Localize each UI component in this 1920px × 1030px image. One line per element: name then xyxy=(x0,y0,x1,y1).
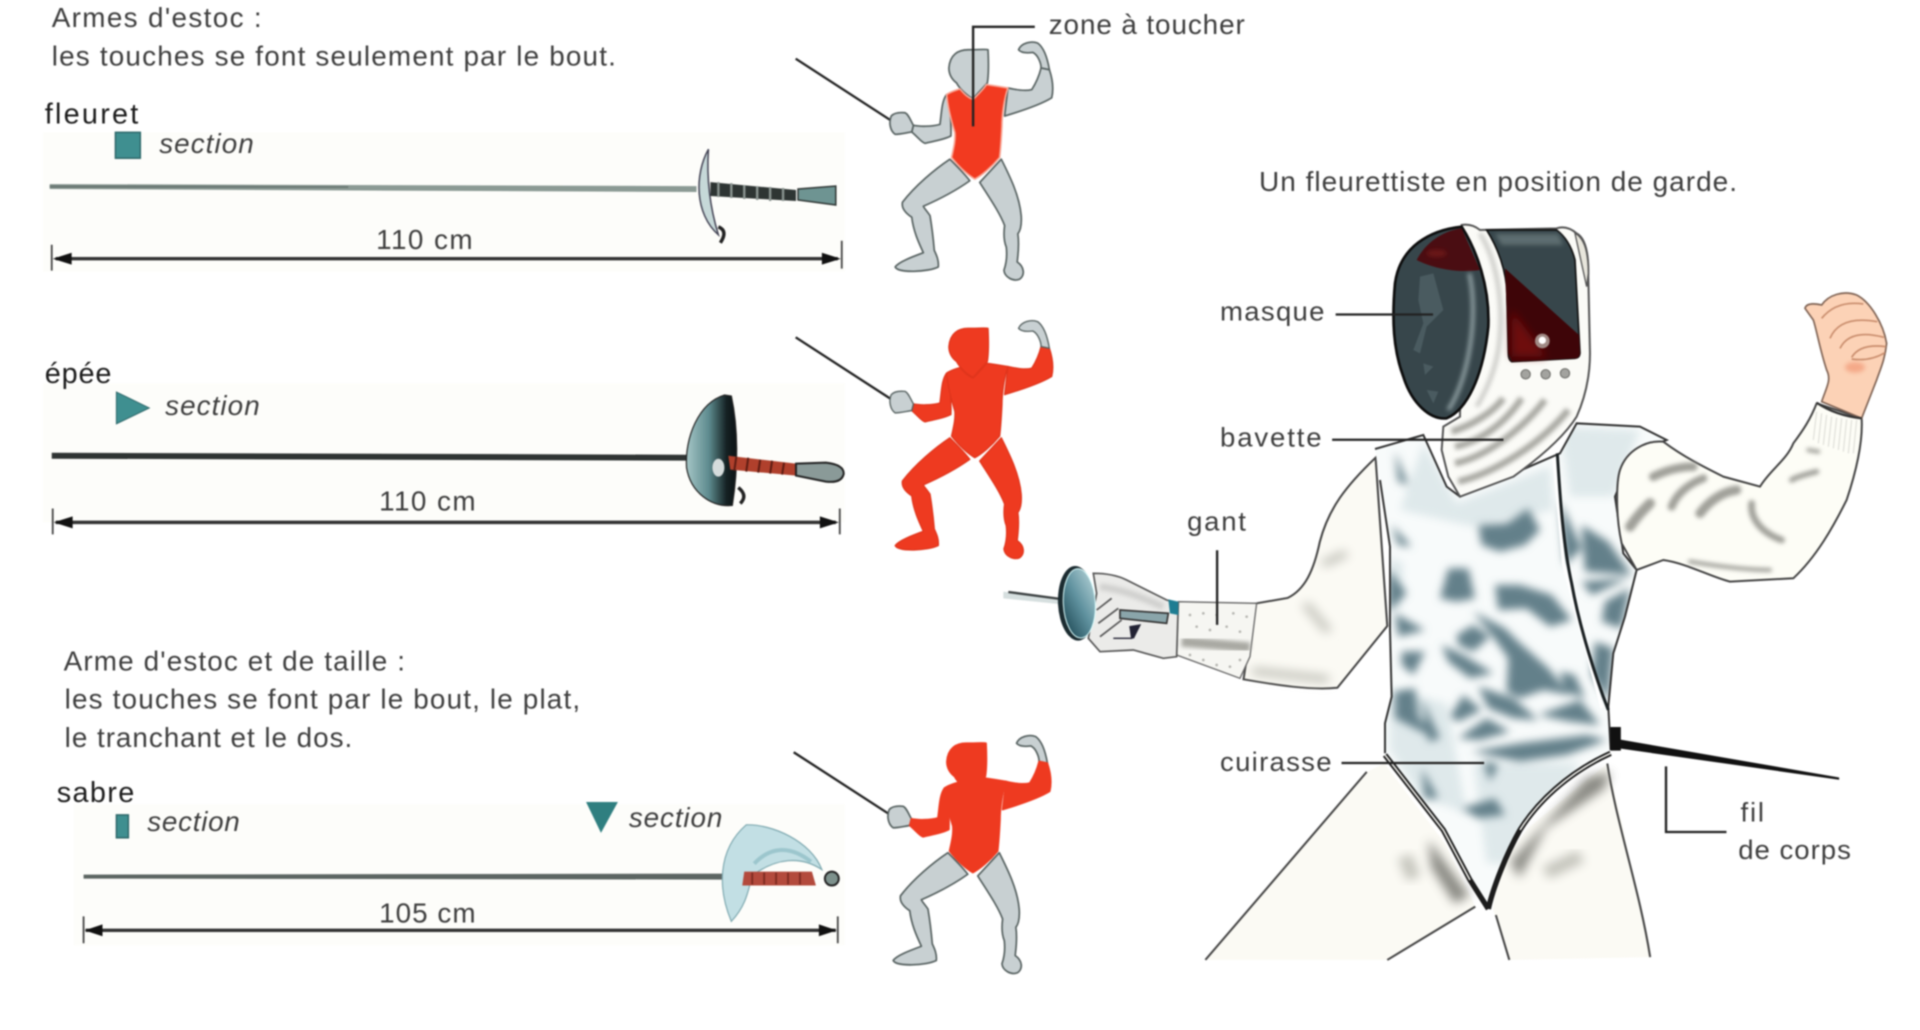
glove xyxy=(1088,573,1178,658)
label: fil de corps: de corps xyxy=(1738,835,1851,865)
label: gant xyxy=(1187,507,1246,625)
sleeve xyxy=(1617,403,1862,582)
label: bavette: bavette xyxy=(1220,423,1322,452)
body wire xyxy=(1610,727,1839,780)
cuff ribbing xyxy=(1813,412,1857,453)
cuirasse xyxy=(1375,423,1667,909)
heading: armes d'estoc xyxy=(52,2,616,72)
label: fleuret: fleuret xyxy=(45,98,138,130)
legs xyxy=(1205,764,1650,960)
figure: fleuret target zone xyxy=(796,42,1053,280)
icon: square section xyxy=(115,132,140,158)
grip xyxy=(1120,610,1168,623)
label: épée: épée xyxy=(45,358,111,390)
heading: armes d'estoc: Armes d'estoc : xyxy=(52,2,262,33)
caption: fleurettiste: Un fleurettiste en position de garde. xyxy=(1259,166,1737,197)
right arm sleeve and fist xyxy=(1617,293,1887,582)
figure: sabre target zone xyxy=(794,736,1051,973)
illustration: fencer in guard position xyxy=(1003,225,1887,960)
mask shell and bib xyxy=(1442,225,1590,497)
heading: arme d'estoc et de taille: les touches se font par le bout, le plat, xyxy=(65,683,580,714)
side panel xyxy=(1487,230,1580,362)
legs and left sleeve xyxy=(1205,458,1650,960)
épée weapon xyxy=(52,395,844,506)
label: masque: masque xyxy=(1220,297,1325,327)
label: section: section xyxy=(165,390,260,421)
dimension arrow xyxy=(52,241,842,271)
panel: fleuret xyxy=(43,98,845,272)
panel: épée xyxy=(43,358,845,534)
label: fil de corps xyxy=(1666,766,1851,865)
label: length: 110 cm xyxy=(379,485,476,516)
shell shading xyxy=(1477,233,1501,407)
icon: triangle section xyxy=(116,392,149,424)
heading: arme d'estoc et de taille xyxy=(64,646,580,753)
panel: sabre xyxy=(57,777,845,945)
ear flap xyxy=(1575,233,1588,287)
label: length: 105 cm xyxy=(379,897,476,928)
waist piping xyxy=(1385,753,1611,909)
label: cuirasse: cuirasse xyxy=(1220,747,1332,777)
figure: épée target zone xyxy=(796,321,1053,559)
dimension arrow xyxy=(84,916,838,943)
label: fil de corps: fil xyxy=(1741,798,1764,827)
label: section: section xyxy=(159,128,254,159)
heading: arme d'estoc et de taille: le tranchant et le dos. xyxy=(65,722,352,753)
icon: inverted triangle section xyxy=(586,802,618,833)
cuff xyxy=(1177,602,1257,678)
foil weapon xyxy=(50,149,836,243)
label: section: section xyxy=(629,802,722,833)
label: length: 110 cm xyxy=(376,224,473,255)
sabre weapon xyxy=(84,825,839,921)
label: gant: gant xyxy=(1187,507,1246,536)
label: sabre: sabre xyxy=(57,777,134,809)
masque and bavette xyxy=(1393,225,1590,497)
sword xyxy=(794,752,890,815)
sword xyxy=(796,337,892,400)
labels layer xyxy=(1187,297,1851,865)
bib stripes xyxy=(1452,398,1568,482)
heading: armes d'estoc: les touches se font seulement par le bout. xyxy=(52,41,616,72)
label: section: section xyxy=(147,806,240,837)
dimension arrow xyxy=(53,508,840,534)
sword xyxy=(796,59,892,121)
icon: rectangle section xyxy=(116,815,128,838)
heading: arme d'estoc et de taille: Arme d'estoc et de taille : xyxy=(64,646,405,677)
label: zone à toucher xyxy=(973,9,1245,126)
left sleeve xyxy=(1244,458,1387,688)
hand xyxy=(1805,293,1887,418)
front visor xyxy=(1393,227,1488,418)
gant, cuff and foil guard xyxy=(1003,565,1257,678)
left column: weapons and target zones xyxy=(43,2,1245,973)
vent dots xyxy=(1521,369,1570,379)
blade xyxy=(1003,592,1068,605)
label: zone à toucher: zone à toucher xyxy=(1049,9,1245,40)
guard xyxy=(1056,565,1097,642)
